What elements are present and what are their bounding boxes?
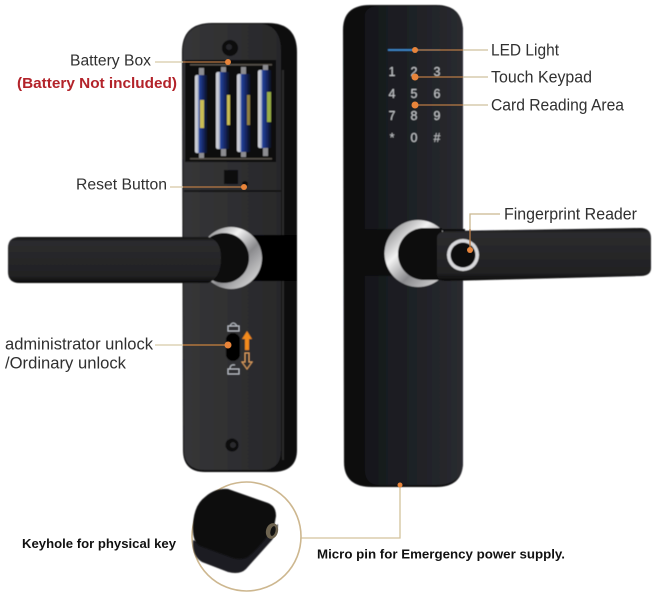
- icon: unlocked padlock: [228, 365, 239, 374]
- left handle: [8, 227, 297, 289]
- right lock: front view with keypad: [343, 5, 651, 487]
- label: touch keypad: Touch Keypad: [491, 68, 592, 86]
- label: fingerprint reader: Fingerprint Reader: [504, 206, 637, 224]
- fingerprint sensor: [447, 239, 479, 271]
- LED light bar: [388, 49, 440, 51]
- icon: brass keyhole: [264, 522, 280, 540]
- touch keypad digits: 7: [389, 109, 396, 123]
- touch keypad digits: #: [434, 131, 441, 145]
- right handle: [365, 220, 651, 287]
- label: card reading area: Card Reading Area: [491, 96, 625, 114]
- touch keypad digits: 6: [434, 87, 441, 101]
- touch keypad digits: 2: [411, 65, 418, 79]
- battery compartment: [185, 60, 276, 162]
- label: unlock mode: [5, 336, 154, 372]
- device top face: [193, 489, 276, 559]
- label: micro pin: Micro pin for Emergency power supply.: [317, 546, 565, 562]
- icon: bottom keyhole screw: [226, 438, 238, 452]
- icon: camera sensor: [222, 40, 238, 56]
- mode switch slot: [226, 333, 240, 361]
- touch keypad digits: [389, 65, 441, 145]
- callout lines and dots: [155, 50, 500, 538]
- label: LED light: LED Light: [491, 42, 559, 60]
- label: keyhole: Keyhole for physical key: [22, 536, 177, 551]
- icon: outline down arrow: [242, 353, 252, 369]
- left lock: back view with battery box: [8, 23, 297, 472]
- icon: orange up arrow: [242, 331, 252, 350]
- touch keypad digits: 4: [389, 87, 396, 101]
- label: reset button: Reset Button: [76, 176, 167, 194]
- touch keypad digits: 9: [434, 109, 441, 123]
- icon: locked padlock: [228, 323, 239, 331]
- touch keypad digits: 0: [411, 131, 418, 145]
- touch keypad digits: 3: [434, 65, 441, 79]
- label: unlock mode: administrator unlock: [5, 336, 154, 354]
- touch keypad digits: 5: [411, 87, 418, 101]
- touch keypad digits: 1: [389, 65, 396, 79]
- touch keypad digits: 8: [411, 109, 418, 123]
- reset button recess: [224, 170, 238, 184]
- touch keypad digits: *: [390, 131, 395, 145]
- orange callout dots: [224, 47, 473, 488]
- inset: keyhole close-up: [192, 482, 301, 591]
- device body lower face: [193, 524, 278, 573]
- label: battery not included: (Battery Not included): [17, 75, 177, 92]
- label: unlock mode: /Ordinary unlock: [5, 354, 127, 372]
- label: battery box: Battery Box: [70, 52, 151, 70]
